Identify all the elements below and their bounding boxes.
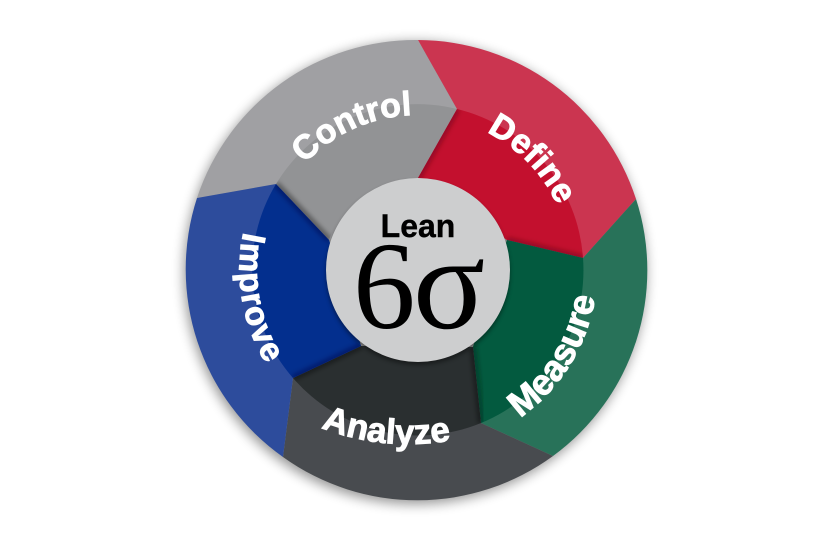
- hub title: Lean: Lean: [381, 208, 455, 244]
- segment: Define: [418, 40, 636, 258]
- label: Define: Define: [488, 112, 572, 202]
- segment: Improve: [186, 184, 361, 457]
- label: Analyze: Analyze: [321, 408, 450, 452]
- Lean Six Sigma DMAIC wheel: [176, 34, 654, 512]
- hub symbol: six sigma: σ: [413, 209, 485, 357]
- hub symbol: six sigma: 6: [353, 218, 416, 356]
- label: Improve: Improve: [232, 234, 279, 362]
- segment: Control: [197, 40, 457, 240]
- hub symbol: six sigma: [353, 209, 485, 357]
- wheel drop shadow: [184, 42, 646, 504]
- label: Control: Control: [293, 90, 410, 159]
- center hub: [326, 178, 510, 362]
- label: Measure: Measure: [506, 296, 594, 418]
- segment: Analyze: [283, 346, 553, 500]
- center hub shadow: [326, 181, 510, 365]
- segment: Measure: [473, 199, 647, 456]
